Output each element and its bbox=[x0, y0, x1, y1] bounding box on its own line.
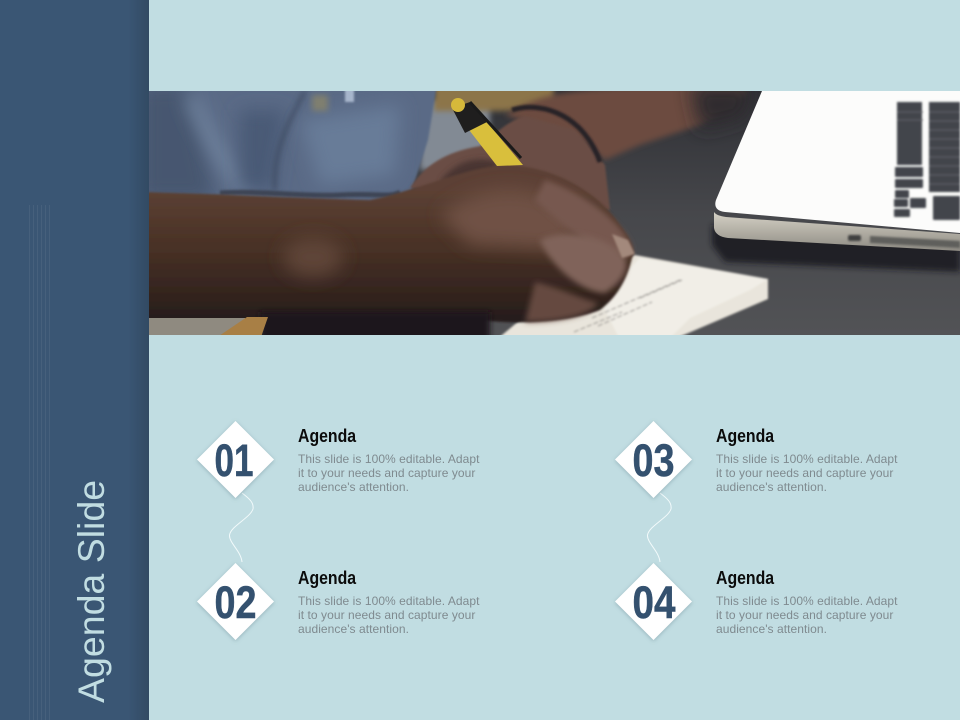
background wall and tan area bbox=[420, 85, 554, 170]
sidebar title: Agenda Slide bbox=[70, 480, 112, 703]
diamond 03 bbox=[615, 421, 692, 498]
shirt bbox=[140, 85, 437, 205]
connector 01 to 02 bbox=[229, 493, 253, 562]
agenda item 04 text: This slide is 100% editable. Adapt bbox=[716, 594, 897, 608]
connector 03 to 04 bbox=[647, 493, 671, 562]
keyboard bbox=[894, 102, 960, 220]
photo: hand writing beside a laptop bbox=[149, 91, 960, 335]
diamond 04: 04 bbox=[632, 577, 676, 628]
agenda item 04 text: it to your needs and capture your bbox=[716, 608, 893, 622]
laptop bbox=[712, 91, 960, 272]
agenda item 01 heading: Agenda bbox=[298, 426, 356, 446]
desk bbox=[149, 91, 960, 335]
agenda item 01 text bbox=[298, 452, 480, 494]
agenda item 04 text bbox=[716, 594, 898, 636]
agenda item 01 text: This slide is 100% editable. Adapt bbox=[298, 452, 479, 466]
agenda item 04 text: audience's attention. bbox=[716, 622, 827, 636]
agenda item 02 text bbox=[298, 594, 480, 636]
agenda item 02 text: it to your needs and capture your bbox=[298, 608, 475, 622]
agenda item 03 text: This slide is 100% editable. Adapt bbox=[716, 452, 897, 466]
agenda item 01 text: audience's attention. bbox=[298, 480, 409, 494]
far arm and hand bbox=[410, 85, 755, 210]
diamond 03: 03 bbox=[632, 435, 674, 486]
diamond 01 bbox=[197, 421, 274, 498]
sidebar panel bbox=[0, 0, 149, 720]
diamond 02: 02 bbox=[214, 577, 256, 628]
agenda item 02 text: This slide is 100% editable. Adapt bbox=[298, 594, 479, 608]
agenda item 02 text: audience's attention. bbox=[298, 622, 409, 636]
sidebar pinstripes bbox=[29, 205, 51, 720]
agenda item 03 text: audience's attention. bbox=[716, 480, 827, 494]
writing hand and forearm bbox=[140, 165, 635, 345]
agenda item 02 heading: Agenda bbox=[298, 568, 356, 588]
table strip bottom left bbox=[140, 317, 268, 343]
agenda item 01 text: it to your needs and capture your bbox=[298, 466, 475, 480]
agenda item 04 heading: Agenda bbox=[716, 568, 774, 588]
diamond 01: 01 bbox=[214, 435, 254, 486]
diamond 02 bbox=[197, 563, 274, 640]
paper bbox=[496, 255, 768, 340]
diamond 04 bbox=[615, 563, 692, 640]
agenda item 03 heading: Agenda bbox=[716, 426, 774, 446]
agenda item 03 text: it to your needs and capture your bbox=[716, 466, 893, 480]
wristband bbox=[512, 107, 600, 162]
pen bbox=[451, 98, 523, 166]
agenda item 03 text bbox=[716, 452, 898, 494]
